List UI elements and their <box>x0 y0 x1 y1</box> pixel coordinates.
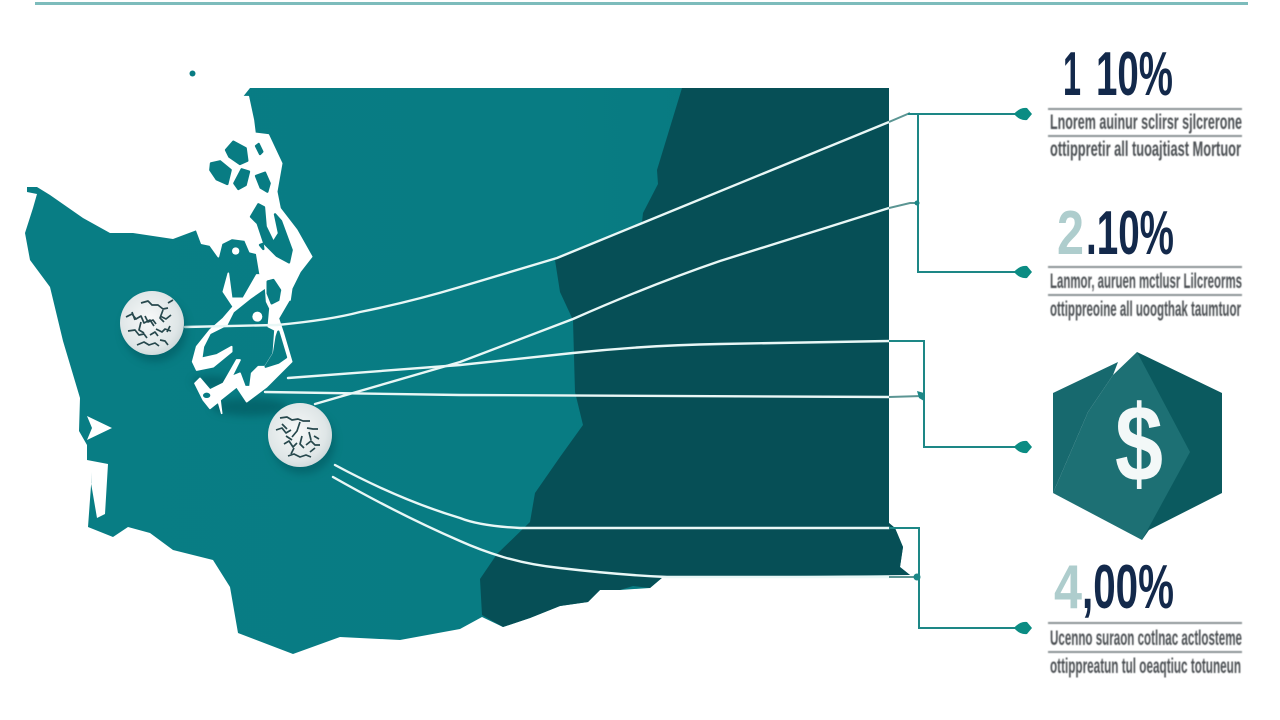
small island dot <box>190 70 196 76</box>
stat value: 2 <box>1057 199 1084 268</box>
stat description <box>1048 109 1242 161</box>
map base: western region <box>25 88 910 654</box>
white route lines <box>185 122 889 577</box>
icon: hexagon with dollar sign: $ <box>1115 383 1163 505</box>
stat block 2 <box>1048 199 1242 321</box>
stat description <box>1048 623 1242 678</box>
map: dark eastern region <box>480 88 910 627</box>
stat block 1 <box>1048 40 1242 161</box>
stat value <box>1063 40 1173 109</box>
map: Grays Harbor inlet <box>87 416 112 440</box>
stat description <box>1048 267 1242 321</box>
stat value: ,00% <box>1082 553 1174 622</box>
stat value: 4 <box>1054 553 1082 622</box>
map of Washington state <box>25 88 910 654</box>
location marker 2 <box>268 403 335 474</box>
stat value <box>1054 553 1174 622</box>
stat value: 10% <box>1096 40 1173 109</box>
stat value <box>1057 199 1174 268</box>
stat value: 1 <box>1063 40 1081 109</box>
map: Puget Sound water <box>167 97 312 413</box>
location marker 1 <box>120 291 187 362</box>
stat block 3 <box>1048 553 1242 678</box>
stat value: .10% <box>1086 199 1174 268</box>
icon: hexagon with dollar sign <box>1053 352 1222 540</box>
top rule <box>35 2 1248 5</box>
teal connectors <box>889 108 1032 634</box>
map: shadow under the sound <box>192 376 288 416</box>
